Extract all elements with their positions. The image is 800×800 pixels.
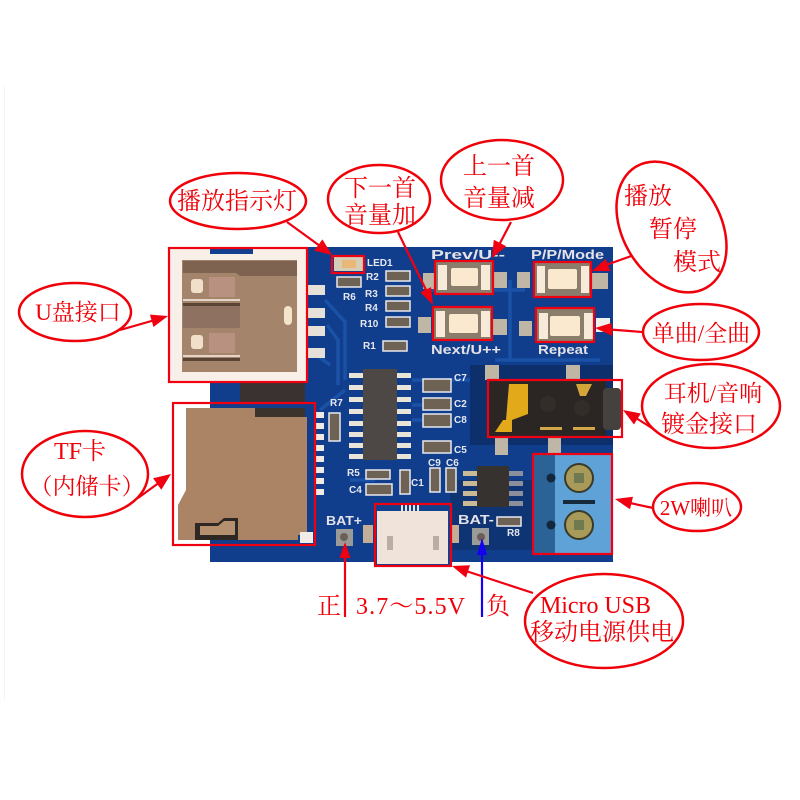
text: battery voltage range [317, 593, 510, 620]
arrow: negative power to BAT- [477, 538, 487, 617]
callout: prev track volume down: 音量减 [463, 185, 535, 212]
highlight frames [169, 248, 622, 566]
silkscreen labels: R10 [360, 319, 379, 330]
callout: play pause mode: 播放 [624, 183, 672, 210]
component: audio jack [488, 381, 621, 436]
arrow: USB label to USB port [120, 315, 168, 330]
silkscreen labels [326, 248, 604, 539]
silkscreen labels: C4 [349, 485, 362, 496]
panel: circuit board [210, 247, 613, 562]
arrow: prev label to prev button [492, 222, 511, 258]
callout: play pause mode [594, 142, 749, 312]
silkscreen labels: C5 [454, 445, 467, 456]
silkscreen labels: C8 [454, 415, 467, 426]
arrow: repeat label to repeat button [595, 323, 642, 336]
callout: USB disk port [19, 283, 131, 341]
callout: gold plated headphone speaker jack [642, 364, 780, 448]
silkscreen labels: R6 [343, 292, 356, 303]
callout: play pause mode: 暂停 [649, 216, 697, 243]
component: micro USB port [375, 504, 450, 565]
callout: micro USB power supply: 移动电源供电 [530, 619, 674, 646]
silkscreen labels: P/P/Mode [531, 248, 604, 262]
text: battery voltage range: 负 [486, 593, 510, 620]
silkscreen labels: R3 [365, 289, 378, 300]
silkscreen labels: Next/U++ [431, 343, 501, 357]
callout: play indicator LED [170, 173, 306, 229]
silkscreen labels: C2 [454, 399, 467, 410]
silkscreen labels: R5 [347, 468, 360, 479]
resistor and capacitor pads [329, 271, 521, 526]
component: play pause mode button [534, 262, 591, 297]
silkscreen labels: Prev/U-- [431, 248, 505, 262]
silkscreen labels: LED1 [367, 258, 393, 269]
component: USB port [170, 248, 306, 381]
silkscreen labels: C7 [454, 373, 467, 384]
component: repeat button [536, 308, 594, 342]
silkscreen labels: C9 [428, 458, 441, 469]
button solder pads [363, 272, 610, 543]
arrow: positive power to BAT+ [340, 542, 350, 617]
callout: micro USB power supply [525, 574, 683, 668]
arrow: jack label to audio jack [623, 410, 655, 430]
component: TF card slot [174, 404, 313, 544]
callout: prev track volume down: 上一首 [463, 153, 535, 180]
TF contact pads [316, 412, 324, 495]
callout: 2W speaker [653, 483, 741, 531]
amplifier chip [463, 466, 523, 507]
arrow: TF label to TF slot [138, 474, 171, 498]
component: prev button [436, 261, 493, 294]
callout: TF card [22, 431, 148, 517]
callout: micro USB power supply: Micro USB [540, 593, 651, 619]
callout: gold plated headphone speaker jack: 镀金接口 [661, 411, 757, 438]
callout: TF card: TF卡 [54, 438, 106, 465]
text: battery voltage range: 3.7～5.5V [356, 594, 466, 620]
arrow: mode label to mode button [592, 254, 637, 271]
component: next button [434, 307, 492, 340]
text: battery voltage range: 正 [317, 594, 341, 620]
silkscreen labels: BAT- [458, 513, 494, 527]
callout: play pause mode: 模式 [673, 249, 721, 276]
component: LED [334, 257, 363, 271]
callout: single all repeat [643, 304, 759, 360]
silkscreen labels: R4 [365, 303, 378, 314]
callout: next track volume up: 音量加 [344, 202, 416, 229]
callout: 2W speaker: 2W喇叭 [660, 496, 732, 520]
callout: TF card: （内储卡） [30, 474, 144, 499]
arrow: micro USB label to port [452, 565, 533, 593]
silkscreen labels: R1 [363, 341, 376, 352]
silkscreen labels: R2 [366, 272, 379, 283]
main chip [349, 369, 411, 460]
arrow: LED label to LED [287, 222, 332, 255]
silkscreen labels: BAT+ [326, 514, 362, 528]
USB solder tabs [240, 285, 325, 402]
silkscreen labels: Repeat [538, 343, 589, 357]
callout: next track volume up: 下一首 [344, 175, 416, 202]
callout: USB disk port: U盘接口 [35, 300, 121, 325]
callout: play indicator LED: 播放指示灯 [177, 188, 297, 215]
component: screw terminal [533, 455, 612, 553]
silkscreen labels: R7 [330, 398, 343, 409]
callout: next track volume up [328, 165, 430, 233]
callout: gold plated headphone speaker jack: 耳机/音响 [664, 381, 762, 406]
silkscreen labels: R8 [507, 528, 520, 539]
callout: single all repeat: 单曲/全曲 [652, 321, 750, 346]
callout: prev track volume down [441, 140, 563, 220]
arrow: speaker label to terminal [615, 497, 653, 509]
silkscreen labels: C6 [446, 458, 459, 469]
arrow: next label to next button [398, 232, 433, 305]
silkscreen labels: C1 [411, 478, 424, 489]
solder pads BAT [336, 528, 489, 546]
